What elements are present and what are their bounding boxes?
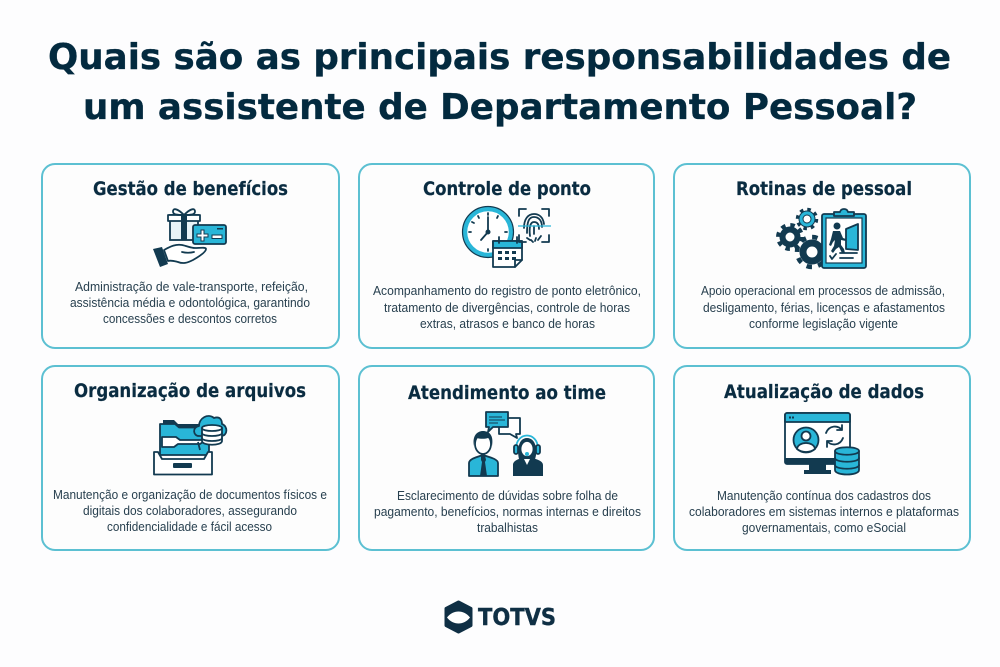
description: Organização de arquivos: confidencialidade e fácil acesso: [107, 520, 272, 534]
description: Gestão de benefícios: Administração de vale-transporte, refeição,: [75, 280, 308, 294]
icon: logo hexagon: [446, 602, 471, 632]
description: Atualização de dados: governamentais, como eSocial: [742, 521, 906, 535]
panel: Rotinas de pessoal: [674, 164, 970, 348]
icon: file tray, cloud and database: [154, 416, 226, 474]
description: Organização de arquivos: [53, 488, 327, 534]
title: um assistente de Departamento Pessoal?: [83, 87, 917, 128]
heading: Controle de ponto: Controle de ponto: [423, 178, 591, 200]
icon: clock, calendar and fingerprint: [462, 206, 551, 267]
description: Controle de ponto: tratamento de divergências, controle de horas: [384, 301, 630, 315]
description: Rotinas de pessoal: Apoio operacional em processos de admissão,: [701, 284, 945, 298]
description: Gestão de benefícios: concessões e descontos corretos: [103, 312, 277, 326]
logo: TOTVS: TOTVS: [478, 605, 556, 631]
description: Controle de ponto: extras, atrasos e banco de horas: [420, 317, 595, 331]
description: Gestão de benefícios: [70, 280, 310, 326]
description: Atualização de dados: [689, 489, 959, 535]
description: Organização de arquivos: Manutenção e organização de documentos físicos e: [53, 488, 327, 502]
panel: Organização de arquivos: [42, 366, 339, 550]
icon: gift, card and hand: [153, 209, 226, 267]
panel: Atendimento ao time: [359, 366, 654, 550]
icon: monitor, profile, sync and database: [785, 413, 859, 474]
description: Atendimento ao time: trabalhistas: [477, 521, 538, 535]
heading: Rotinas de pessoal: Rotinas de pessoal: [736, 178, 912, 200]
icon: gears and clipboard: [778, 209, 866, 268]
icon: two people talking: [469, 412, 543, 476]
heading: Organização de arquivos: Organização de arquivos: [74, 380, 306, 402]
panel: Gestão de benefícios: [42, 164, 339, 348]
description: Atendimento ao time: pagamento, benefícios, normas internas e direitos: [374, 505, 641, 519]
panel: Atualização de dados: [674, 366, 970, 550]
description: Controle de ponto: [373, 284, 641, 331]
title: [48, 37, 951, 128]
description: Atualização de dados: colaboradores em sistemas internos e plataformas: [689, 505, 959, 519]
description: Atualização de dados: Manutenção contínua dos cadastros dos: [717, 489, 931, 503]
title: Quais são as principais responsabilidades de: [48, 37, 951, 78]
heading: Atualização de dados: Atualização de dados: [724, 381, 924, 403]
description: Rotinas de pessoal: [701, 284, 945, 331]
description: Atendimento ao time: [374, 489, 641, 535]
heading: Gestão de benefícios: Gestão de benefícios: [93, 178, 288, 200]
panel: Controle de ponto: [359, 164, 654, 348]
description: Organização de arquivos: digitais dos colaboradores, assegurando: [83, 504, 297, 518]
description: Atendimento ao time: Esclarecimento de dúvidas sobre folha de: [397, 489, 618, 503]
description: Controle de ponto: Acompanhamento do registro de ponto eletrônico,: [373, 284, 641, 298]
description: Rotinas de pessoal: conforme legislação vigente: [749, 317, 898, 331]
logo: TOTVS: [446, 602, 556, 632]
description: Gestão de benefícios: assistência média e odontológica, garantindo: [70, 296, 310, 310]
heading: Atendimento ao time: Atendimento ao time: [408, 382, 606, 404]
description: Rotinas de pessoal: desligamento, férias, licenças e afastamentos: [703, 301, 945, 315]
